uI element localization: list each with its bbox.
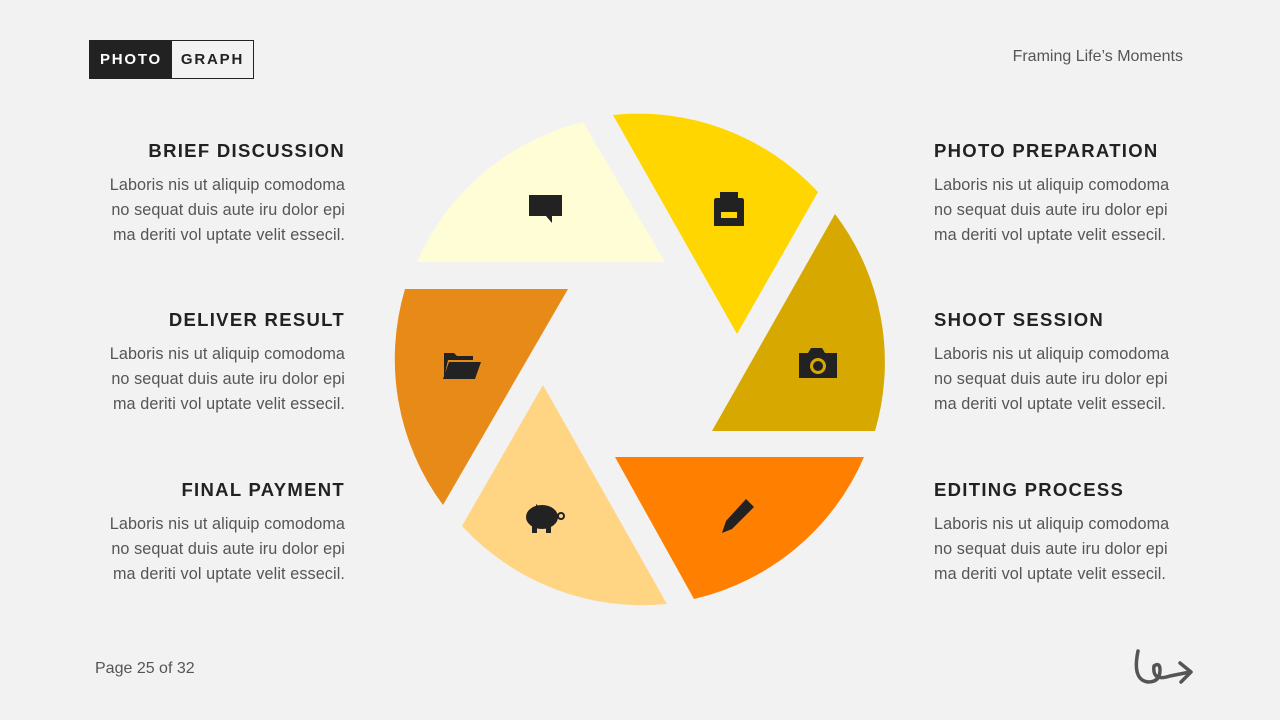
text: no sequat duis aute iru dolor epi: [111, 370, 345, 388]
text: EDITING PROCESS: [934, 479, 1124, 500]
text: Laboris nis ut aliquip comodoma: [934, 515, 1169, 533]
text: no sequat duis aute iru dolor epi: [934, 370, 1168, 388]
text: ma deriti vol uptate velit essecil.: [934, 226, 1166, 244]
swirl logo: [1136, 651, 1191, 682]
left texts: BRIEF DISCUSSION: [148, 140, 345, 161]
text: ma deriti vol uptate velit essecil.: [113, 565, 345, 583]
text: no sequat duis aute iru dolor epi: [111, 201, 345, 219]
text: no sequat duis aute iru dolor epi: [934, 540, 1168, 558]
text: Laboris nis ut aliquip comodoma: [934, 345, 1169, 363]
text: Laboris nis ut aliquip comodoma: [110, 515, 345, 533]
text: ma deriti vol uptate velit essecil.: [113, 395, 345, 413]
text: SHOOT SESSION: [934, 309, 1104, 330]
text: FINAL PAYMENT: [181, 479, 345, 500]
logo: GRAPH: [181, 51, 244, 68]
text: ma deriti vol uptate velit essecil.: [934, 565, 1166, 583]
logo: PHOTO: [100, 51, 162, 68]
right texts: PHOTO PREPARATION: [934, 140, 1159, 161]
text: DELIVER RESULT: [169, 309, 345, 330]
text: Laboris nis ut aliquip comodoma: [934, 176, 1169, 194]
tagline: Framing Life’s Moments: [1013, 48, 1183, 65]
logo: [89, 40, 254, 79]
text: ma deriti vol uptate velit essecil.: [934, 395, 1166, 413]
text: ma deriti vol uptate velit essecil.: [113, 226, 345, 244]
text: Laboris nis ut aliquip comodoma: [110, 345, 345, 363]
text: no sequat duis aute iru dolor epi: [934, 201, 1168, 219]
text: no sequat duis aute iru dolor epi: [111, 540, 345, 558]
page number: Page 25 of 32: [95, 660, 195, 677]
text: Laboris nis ut aliquip comodoma: [110, 176, 345, 194]
